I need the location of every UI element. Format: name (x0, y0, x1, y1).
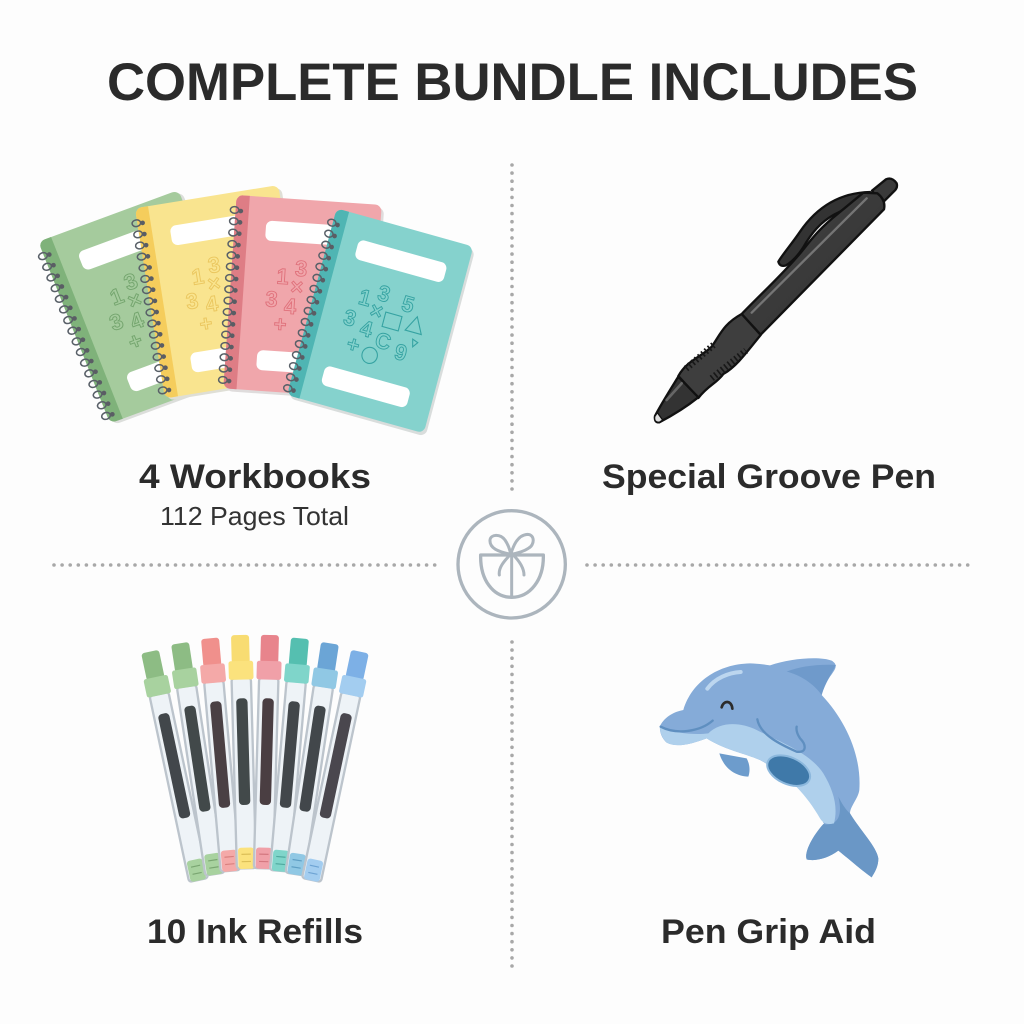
workbook: green: 4 (127, 307, 148, 335)
workbook: teal: 3 (341, 304, 359, 332)
refill 3 (198, 637, 243, 873)
icon: gift in circle (458, 511, 565, 618)
dolphin grip hole (763, 749, 815, 792)
workbook: green: 3 (106, 308, 127, 336)
workbook: teal: 1 (356, 284, 374, 312)
label: 10 Ink Refills: 10 Ink Refills (147, 913, 363, 951)
panel: workbooks (33, 185, 476, 531)
workbook: teal (281, 207, 476, 437)
workbook: teal: 4 (357, 315, 375, 343)
workbook: pink (218, 195, 384, 401)
workbook: green: 3 (120, 268, 141, 296)
dolphin eye (722, 702, 732, 709)
illustration: dolphin grip (660, 658, 878, 877)
label: Special Groove Pen: Special Groove Pen (602, 458, 936, 496)
workbook: pink: × (290, 274, 304, 300)
dolphin highlights (707, 672, 741, 689)
workbook: teal: 3 (375, 280, 393, 307)
workbook: green: 1 (106, 283, 127, 310)
workbook: yellow: 3 (206, 251, 222, 278)
pen grip (678, 314, 761, 398)
workbook: yellow: 4 (204, 290, 221, 317)
dolphin belly (660, 724, 836, 824)
title: COMPLETE BUNDLE INCLUDES (107, 53, 918, 112)
workbook: pink: 3 (294, 256, 308, 282)
pen button (872, 179, 897, 203)
workbook: green (33, 189, 254, 428)
workbook: yellow: + (198, 310, 214, 337)
illustration: four spiral workbooks (33, 185, 476, 437)
panel: pen (602, 179, 936, 496)
pen nose (655, 377, 698, 422)
workbook: pink: 3 (265, 286, 278, 312)
refill 7 (283, 641, 342, 877)
sublabel: 112 Pages Total: 112 Pages Total (160, 501, 349, 531)
workbook: teal: 5 (399, 290, 417, 318)
workbook: green: + (125, 327, 146, 355)
panel: ink refills (138, 635, 372, 951)
dolphin mouth and fin line (661, 719, 805, 752)
workbook: yellow (130, 185, 311, 402)
pen barrel (742, 193, 884, 335)
illustration: eight refills (138, 635, 372, 883)
workbook: yellow: × (206, 270, 222, 297)
workbook: pink: + (273, 311, 287, 337)
refill 5 (251, 635, 282, 869)
panel: grip aid (660, 658, 878, 951)
workbook: pink: 4 (283, 293, 298, 319)
workbook: teal: 9 (392, 338, 410, 366)
refill 6 (267, 637, 312, 873)
workbook: teal: C (372, 327, 394, 356)
dolphin body (660, 658, 878, 877)
dolphin pectoral fin (719, 753, 750, 777)
workbook: teal: × (367, 297, 386, 325)
refill 4 (228, 635, 259, 869)
workbook: teal: + (344, 330, 363, 358)
workbook: yellow: 1 (190, 263, 206, 290)
label: Pen Grip Aid: Pen Grip Aid (661, 913, 876, 951)
refill 8 (299, 649, 372, 883)
workbook: green: × (124, 286, 145, 314)
pen clip (778, 192, 870, 266)
workbook: pink: 1 (276, 263, 290, 289)
refill 2 (168, 641, 227, 877)
illustration: groove pen (655, 179, 897, 422)
label: 4 Workbooks: 4 Workbooks (139, 458, 371, 496)
refill 1 (138, 649, 211, 883)
workbook: yellow: 3 (184, 288, 200, 314)
